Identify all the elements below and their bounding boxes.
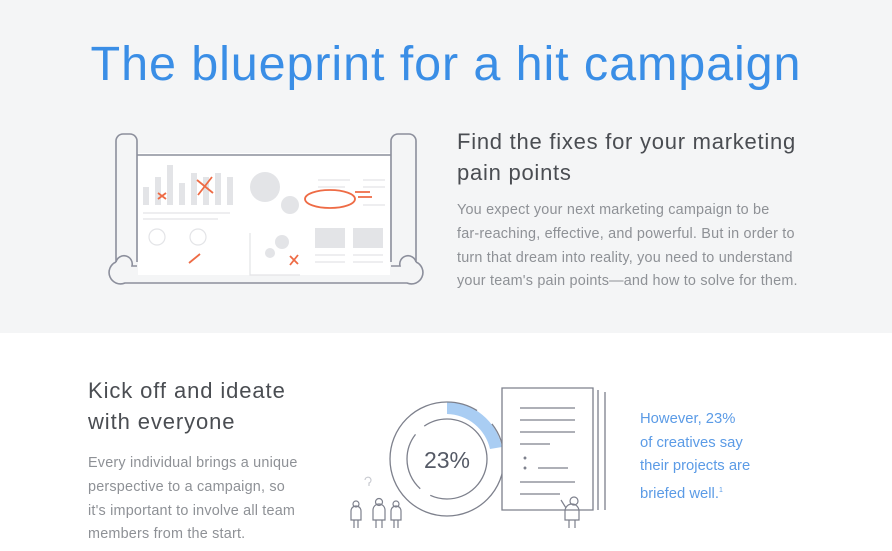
heading: find the fixes [457, 129, 796, 185]
callout: 23% stat: However, 23% [640, 411, 735, 427]
people [351, 477, 579, 528]
text: kick off body: Every individual brings a unique [88, 455, 298, 471]
text: find the fixes body: your team's pain points—and how to solve for them. [457, 273, 798, 289]
text: kick off body [88, 455, 298, 542]
illustration: donut chart and brief [350, 387, 606, 528]
text: kick off body: members from the start. [88, 526, 245, 542]
document [502, 388, 605, 510]
title: The blueprint for a hit campaign [91, 37, 801, 91]
heading: kick off: with everyone [88, 409, 235, 434]
text: find the fixes body: turn that dream into reality, you need to understand [457, 250, 793, 266]
text: find the fixes body: far-reaching, effective, and powerful. But in order to [457, 226, 795, 242]
callout: 23% stat [640, 411, 750, 502]
heading: find the fixes: pain points [457, 160, 572, 185]
heading: find the fixes: Find the fixes for your marketing [457, 129, 796, 154]
callout: 23% stat: their projects are [640, 458, 750, 474]
heading: kick off: Kick off and ideate [88, 378, 286, 403]
text: find the fixes body: You expect your next marketing campaign to be [457, 202, 769, 218]
donut chart [390, 402, 504, 516]
text: kick off body: it's important to involve all team [88, 503, 295, 519]
donut chart: 23% [424, 447, 470, 473]
text: kick off body: perspective to a campaign, so [88, 479, 285, 495]
callout: 23% stat: briefed well.1 [640, 486, 723, 502]
callout: 23% stat: of creatives say [640, 435, 743, 451]
text: find the fixes body [457, 202, 798, 289]
heading: kick off [88, 378, 286, 434]
illustration: blueprint scroll [108, 133, 424, 285]
